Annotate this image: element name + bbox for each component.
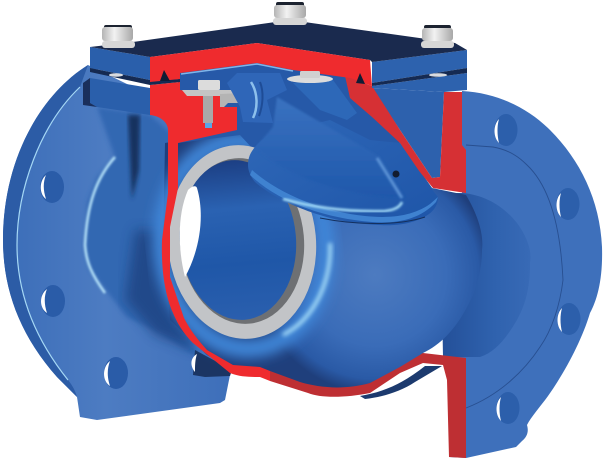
cover red section xyxy=(150,43,372,86)
cover bolts xyxy=(102,2,454,48)
gasket ridges xyxy=(160,70,365,84)
left flange hub shading xyxy=(85,107,200,360)
right web xyxy=(372,88,444,178)
cover flange blue parts xyxy=(83,47,467,115)
body highlight xyxy=(283,243,330,335)
pocket light edge xyxy=(181,64,293,74)
left flange bolt holes xyxy=(40,171,232,389)
hinge bolt and washer xyxy=(182,80,243,128)
arm xyxy=(255,97,405,197)
neck towards right flange xyxy=(440,193,530,357)
cover plate top xyxy=(90,20,467,62)
dark slit under bottom wall xyxy=(360,366,442,399)
section cut: bright red wall and lug xyxy=(150,82,270,381)
section cut: bottom wall and right flange xyxy=(270,353,466,458)
left flange xyxy=(3,65,260,420)
rear boss xyxy=(293,80,357,120)
disc plate xyxy=(248,120,438,225)
chamber behind disc xyxy=(178,60,432,200)
right flange xyxy=(449,91,602,458)
left flange highlight arc xyxy=(85,157,115,293)
right flange bolt holes xyxy=(494,114,580,424)
white see-through crescent xyxy=(180,186,201,277)
bright glow around seat xyxy=(152,133,336,357)
hinge arm and disc xyxy=(227,71,438,225)
disc small drain hole xyxy=(392,170,400,178)
section cut: diagonal wall xyxy=(345,76,466,193)
disc rim bright band xyxy=(250,170,438,222)
hinge barrel xyxy=(227,73,287,123)
seat ring and bore xyxy=(160,139,324,345)
spherical body interior xyxy=(163,100,482,391)
